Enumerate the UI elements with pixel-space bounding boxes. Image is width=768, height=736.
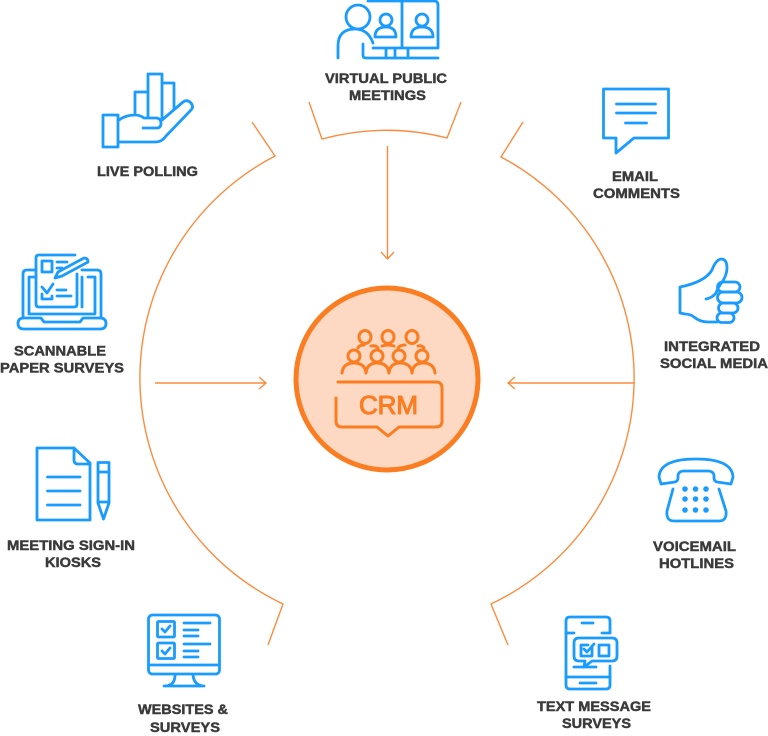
icon: thumbs up (680, 259, 742, 322)
label (325, 71, 447, 103)
item: text message surveys (537, 617, 651, 731)
label: TEXT MESSAGE (537, 699, 651, 714)
item: email comments (593, 89, 680, 201)
icon: keypad dots (682, 486, 709, 513)
item: integrated social media (660, 259, 768, 371)
icon: hand with bar chart (103, 74, 192, 147)
label: WEBSITES & (138, 702, 228, 717)
label (7, 538, 135, 570)
label (0, 344, 124, 376)
label (537, 699, 651, 731)
label: VOICEMAIL (653, 539, 736, 554)
label: KIOSKS (45, 555, 101, 570)
label: MEETINGS (349, 88, 426, 103)
item: websites and surveys (138, 615, 228, 735)
icon: video meeting (338, 1, 438, 58)
label: SURVEYS (150, 720, 220, 735)
item: voicemail hotlines (653, 459, 736, 571)
label (593, 169, 680, 201)
top arc bracket (309, 102, 461, 139)
label (660, 339, 768, 371)
label: MEETING SIGN-IN (7, 538, 135, 553)
arrow: top to centre (381, 146, 394, 259)
item: virtual public meetings (325, 1, 447, 103)
icon: speech bubble (604, 89, 668, 153)
icon: monitor with checklist (148, 615, 220, 686)
label: PAPER SURVEYS (0, 360, 124, 376)
label (653, 539, 736, 571)
label: SURVEYS (562, 716, 631, 731)
icon: telephone (659, 459, 733, 521)
arrow: right to centre (508, 377, 635, 389)
label: INTEGRATED (664, 339, 760, 354)
label: SOCIAL MEDIA (660, 356, 768, 371)
item: meeting sign-in kiosks (7, 448, 135, 570)
arrow: left to centre (155, 377, 266, 389)
right arc bracket (491, 122, 634, 645)
central CRM badge (296, 288, 478, 470)
left arc bracket (140, 122, 283, 645)
label: COMMENTS (593, 186, 680, 201)
label: EMAIL (612, 169, 658, 184)
label: HOTLINES (659, 556, 734, 571)
label (138, 702, 228, 735)
item: scannable paper surveys (0, 255, 124, 376)
label: LIVE POLLING (97, 164, 198, 179)
icon: smartphone with chat (566, 617, 617, 689)
CRM text: CRM (359, 390, 418, 420)
icon: document and pencil (37, 448, 109, 520)
icon: audience (342, 330, 435, 373)
label: VIRTUAL PUBLIC (325, 71, 447, 86)
item: live polling (97, 74, 198, 179)
icon: speech box (336, 382, 442, 436)
label: SCANNABLE (14, 344, 106, 358)
icon: laptop with form (18, 255, 106, 329)
